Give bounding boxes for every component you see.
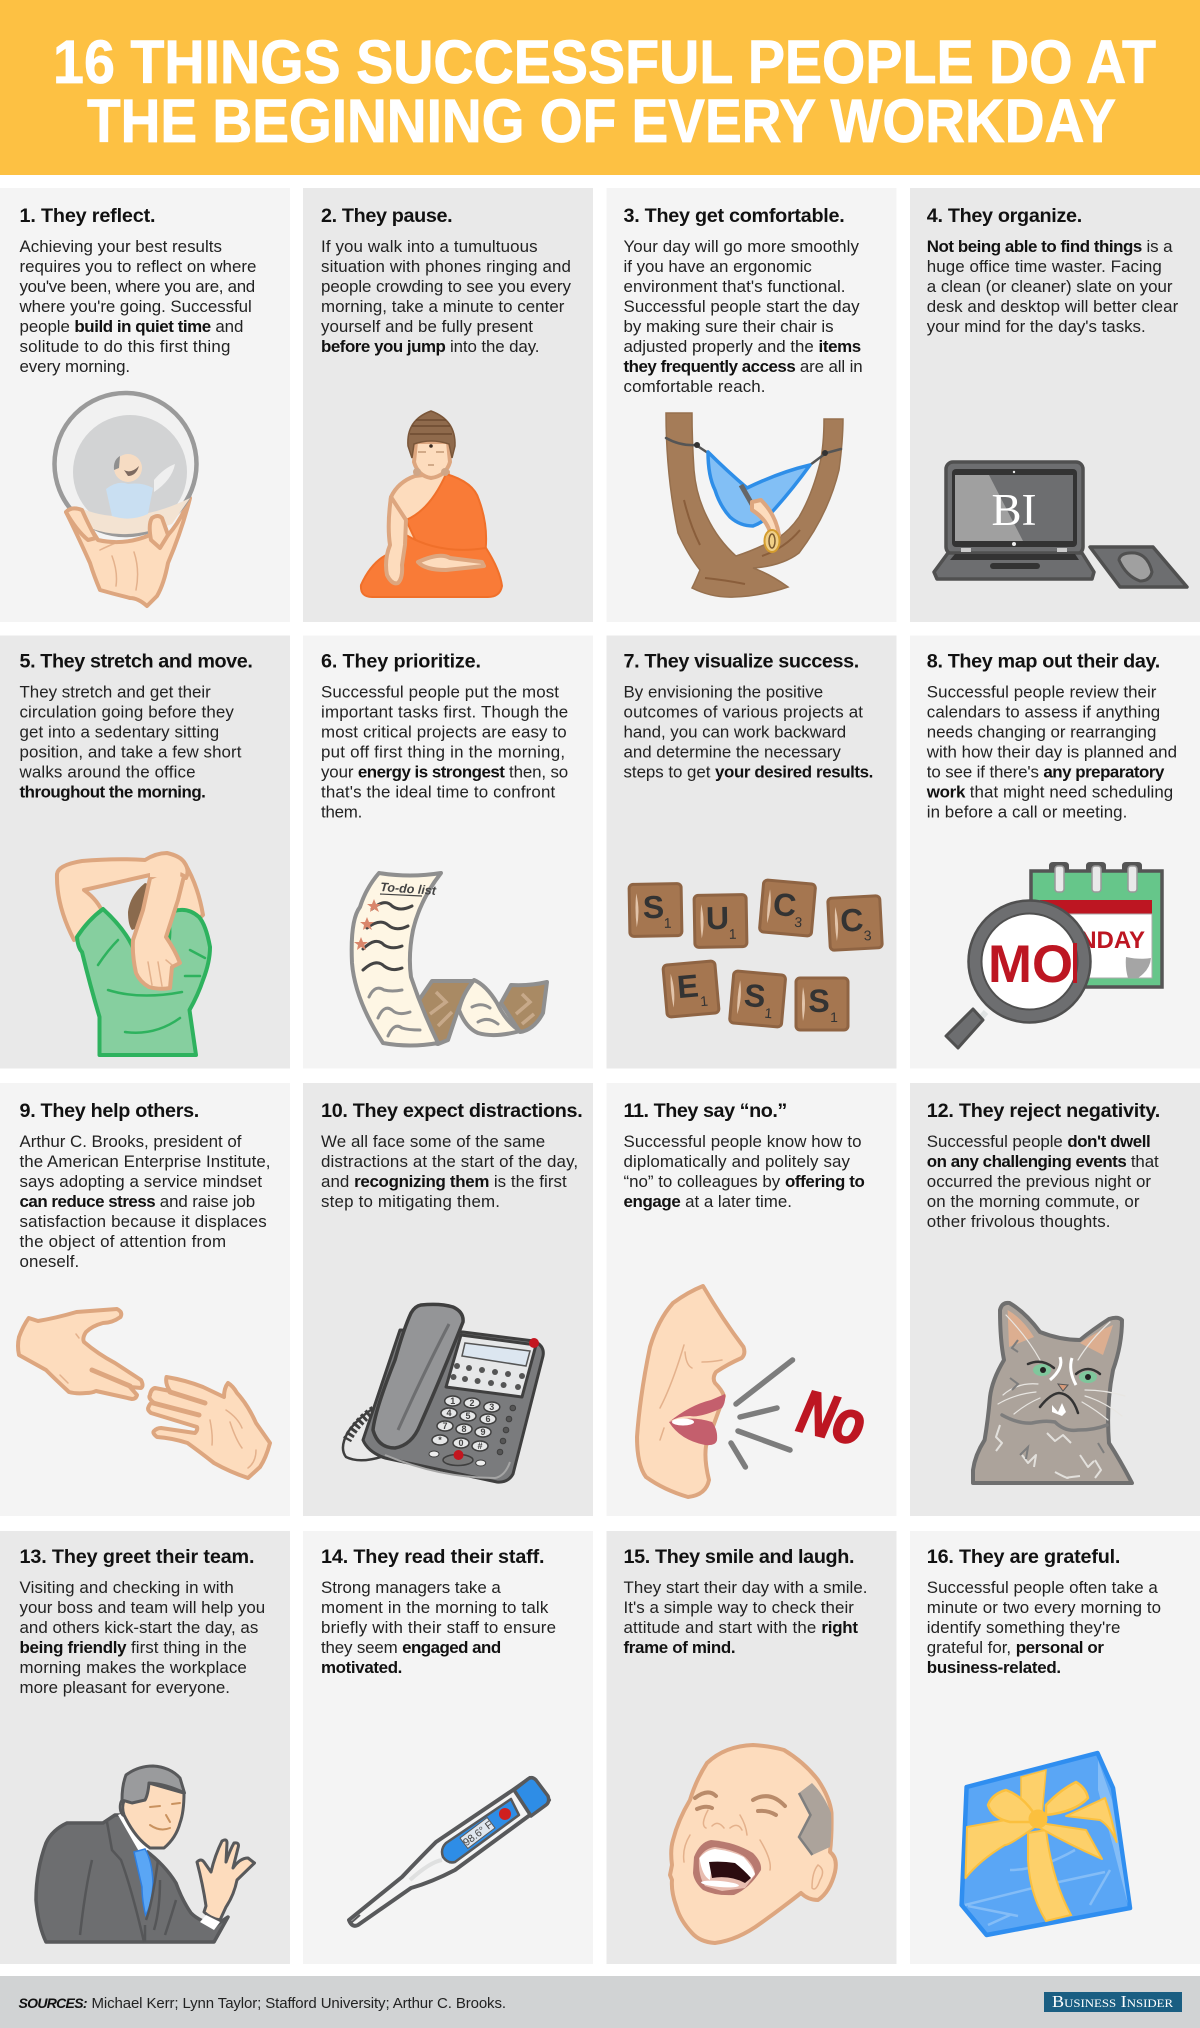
body text 15: They start their day with a smile.: [624, 1578, 868, 1597]
body text 4: desk and desktop will better clear: [927, 297, 1179, 316]
body text 1: Achieving your best results: [20, 237, 222, 256]
body text 3: adjusted properly and the items: [624, 337, 861, 356]
panel 4: They organize: [910, 188, 1200, 622]
body text 9: can reduce stress and raise job: [20, 1192, 255, 1211]
body text 11: Successful people know how to: [624, 1132, 862, 1151]
to-do list label: To-do list: [380, 880, 437, 898]
heading 16: 16. They are grateful.: [927, 1546, 1120, 1568]
icon: left reaching hand: [18, 1309, 142, 1399]
body text 8: work that might need scheduling: [926, 782, 1173, 802]
phone keypad: 9: [480, 1427, 486, 1437]
body text 13: being friendly first thing in the: [20, 1638, 247, 1657]
phone keypad: [429, 1338, 539, 1466]
tile C: C: [772, 886, 798, 924]
body text 2: situation with phones ringing and: [321, 257, 571, 276]
body text 9: the object of attention from: [20, 1232, 226, 1251]
body text 1: you've been, where you are, and: [20, 277, 255, 296]
icon: desk phone: [343, 1304, 543, 1482]
body text 11: diplomatically and politely say: [624, 1152, 851, 1171]
body text 7: hand, you can work backward: [624, 722, 846, 742]
phone keypad: 0: [458, 1438, 464, 1448]
phone keypad: 1: [450, 1396, 455, 1406]
body text 5: walks around the office: [18, 762, 196, 782]
body text 6: most critical projects are easy to: [321, 722, 567, 742]
body text 5: circulation going before they: [20, 702, 234, 722]
tile S: 1: [664, 915, 672, 931]
body text 5: get into a sedentary sitting: [20, 722, 219, 742]
body text 8: to see if there's any preparatory: [927, 762, 1165, 782]
body text 14: moment in the morning to talk: [321, 1598, 549, 1617]
body text 3: Successful people start the day: [624, 297, 860, 316]
thermometer reading: 98.6° F: [461, 1819, 495, 1849]
logo: Business Insider: Business Insider: [1052, 1992, 1173, 2011]
body text 8: Successful people review their: [927, 682, 1157, 702]
body text 8: calendars to assess if anything: [927, 702, 1160, 722]
phone keypad: 6: [485, 1414, 491, 1424]
panel 16: They are grateful: [910, 1531, 1200, 1964]
icon: meditating buddha: [361, 411, 502, 597]
body text 5: They stretch and get their: [20, 682, 211, 702]
tile S: [796, 978, 848, 1030]
body text 6: [321, 682, 568, 822]
body text 12: Successful people don't dwell: [927, 1132, 1150, 1151]
body text 8: [926, 682, 1177, 822]
title: THE BEGINNING OF EVERY WORKDAY: [87, 87, 1116, 155]
body text 7: steps to get your desired results.: [624, 762, 873, 782]
heading 9: 9. They help others.: [20, 1100, 199, 1122]
body text 10: We all face some of the same: [321, 1132, 545, 1151]
body text 4: Not being able to find things is a: [927, 237, 1173, 256]
body text 9: Arthur C. Brooks, president of: [20, 1132, 242, 1151]
panel 15: They smile and laugh: [606, 1531, 896, 1964]
body text 2: morning, take a minute to center: [321, 297, 565, 316]
heading 5: 5. They stretch and move.: [20, 650, 253, 672]
icon: laptop and mouse pad: BI: [992, 485, 1036, 535]
tile U: U: [706, 900, 729, 936]
body text 14: Strong managers take a: [321, 1578, 501, 1597]
magnified text: MO: [988, 935, 1073, 994]
icon: grumpy cat: [973, 1303, 1132, 1483]
tile S: 1: [830, 1009, 838, 1025]
header banner: [0, 0, 1200, 175]
phone keypad: 2: [469, 1398, 475, 1408]
body text 16: Successful people often take a: [927, 1578, 1158, 1597]
icon: right reaching hand: [148, 1377, 270, 1478]
sources line: SOURCES:: [18, 1995, 88, 2011]
body text 3: Your day will go more smoothly: [624, 237, 859, 256]
open mouth: [693, 1840, 761, 1895]
heading 2: 2. They pause.: [321, 205, 453, 227]
body text 1: every morning.: [20, 357, 130, 376]
panel 7: They visualize success: [606, 636, 896, 1068]
panel 6: They prioritize: [303, 636, 593, 1068]
body text 9: [20, 1132, 270, 1271]
tile C: [759, 880, 816, 936]
body text 9: the American Enterprise Institute,: [20, 1152, 270, 1171]
body text 15: [624, 1578, 868, 1657]
body text 3: [624, 237, 863, 396]
icon: laptop and mouse pad: [934, 462, 1187, 587]
body text 3: comfortable reach.: [624, 377, 766, 396]
icon: person stretching arm behind head: [57, 853, 210, 1055]
icon: calendar with magnifying glass: [946, 862, 1162, 1048]
panel 12: They reject negativity: [910, 1083, 1200, 1516]
tile S: S: [808, 983, 830, 1019]
body text 9: oneself.: [20, 1252, 79, 1271]
body text 14: they seem engaged and: [321, 1638, 501, 1657]
body text 15: attitude and start with the right: [624, 1618, 858, 1637]
icon: digital thermometer: [349, 1778, 549, 1926]
body text 2: people crowding to see you every: [321, 277, 571, 296]
panel 5: They stretch and move: [0, 636, 290, 1068]
body text 11: [624, 1132, 865, 1211]
phone keypad: #: [477, 1441, 483, 1451]
no text: No: [792, 1377, 872, 1459]
body text 12: on any challenging events that: [927, 1152, 1159, 1171]
footer bar: [0, 1976, 1200, 2028]
tile U: [694, 895, 747, 947]
body text 1: solitude to do this first thing: [20, 337, 230, 356]
body text 8: with how their day is planned and: [926, 742, 1177, 762]
icon: to-do list scroll: [352, 873, 547, 1046]
heading 10: 10. They expect distractions.: [321, 1100, 583, 1122]
phone keypad: 5: [465, 1411, 471, 1421]
body text 2: If you walk into a tumultuous: [321, 237, 538, 256]
heading 7: 7. They visualize success.: [624, 650, 859, 672]
body text 10: and recognizing them is the first: [321, 1172, 567, 1191]
panel 14: They read their staff: [303, 1531, 593, 1964]
tile U: 1: [729, 926, 737, 942]
icon: face saying no: [637, 1286, 872, 1497]
sources line: Michael Kerr; Lynn Taylor; Stafford University; Arthur C. Brooks.: [92, 1995, 506, 2012]
panel 13: They greet their team: [0, 1531, 290, 1964]
icon: hammock between forked tree: [666, 413, 843, 597]
panel 10: They expect distractions: [303, 1083, 593, 1516]
body text 3: they frequently access are all in: [624, 357, 863, 376]
tile E: [663, 961, 719, 1017]
tile S: S: [642, 889, 664, 925]
calendar day text: NDAY: [1079, 927, 1145, 954]
body text 2: yourself and be fully present: [321, 317, 533, 336]
heading 15: 15. They smile and laugh.: [624, 1546, 854, 1568]
body text 6: put off first thing in the morning,: [321, 742, 565, 762]
body text 2: [321, 237, 571, 356]
body text 12: on the morning commute, or: [927, 1192, 1140, 1211]
body text 14: [321, 1578, 556, 1677]
heading 11: 11. They say “no.”: [624, 1100, 787, 1122]
body text 3: environment that's functional.: [624, 277, 846, 296]
body text 7: outcomes of various projects at: [624, 702, 863, 722]
body text 4: your mind for the day's tasks.: [927, 317, 1146, 336]
body text 7: and determine the necessary: [624, 742, 841, 762]
body text 9: says adopting a service mindset: [20, 1172, 262, 1191]
tile S: 1: [764, 1005, 773, 1021]
body text 14: briefly with their staff to ensure: [321, 1618, 556, 1637]
body text 1: where you're going. Successful: [18, 297, 252, 316]
tile C: [828, 896, 882, 950]
body text 7: [624, 682, 873, 782]
body text 8: needs changing or rearranging: [927, 722, 1156, 742]
phone keypad: 3: [489, 1402, 494, 1412]
body text 10: step to mitigating them.: [321, 1192, 500, 1211]
tile S: [729, 971, 786, 1027]
fingers gripping the ball: [66, 508, 168, 548]
tile E: 1: [700, 993, 709, 1009]
tile C: 3: [863, 927, 872, 944]
tile C: 3: [794, 914, 803, 930]
body text 12: other frivolous thoughts.: [927, 1212, 1110, 1231]
heading 1: 1. They reflect.: [20, 205, 156, 227]
panel 9: They help others: [0, 1083, 290, 1516]
icon: crystal ball held in a hand: [54, 393, 196, 606]
body text 4: a clean (or cleaner) slate on your: [927, 277, 1173, 296]
body text 1: people build in quiet time and: [20, 317, 243, 336]
phone keypad: *: [438, 1435, 442, 1445]
body text 13: Visiting and checking in with: [20, 1578, 234, 1597]
body text 6: that's the ideal time to confront: [321, 782, 555, 802]
icon: gift box with ribbon: [962, 1753, 1130, 1935]
body text 16: business-related.: [927, 1658, 1061, 1677]
body text 6: your energy is strongest then, so: [321, 762, 568, 782]
body text 16: minute or two every morning to: [927, 1598, 1161, 1617]
panel 2: They pause: [303, 188, 593, 622]
icon: laughing man's face: [670, 1745, 836, 1943]
body text 6: them.: [321, 802, 362, 822]
body text 8: in before a call or meeting.: [927, 802, 1127, 822]
body text 5: position, and take a few short: [20, 742, 242, 762]
body text 5: [18, 682, 242, 802]
heading 14: 14. They read their staff.: [321, 1546, 544, 1568]
tile C: C: [839, 902, 864, 939]
body text 9: satisfaction because it displaces: [20, 1212, 267, 1231]
phone keypad: 8: [461, 1424, 467, 1434]
body text 11: engage at a later time.: [624, 1192, 792, 1211]
body text 15: frame of mind.: [624, 1638, 735, 1657]
body text 13: more pleasant for everyone.: [20, 1678, 230, 1697]
tile S: S: [743, 977, 767, 1015]
tile E: E: [676, 967, 700, 1005]
heading 6: 6. They prioritize.: [321, 650, 481, 672]
body text 6: Successful people put the most: [321, 682, 559, 702]
body text 4: [927, 237, 1179, 336]
body text 1: [18, 237, 256, 376]
body text 10: [321, 1132, 578, 1211]
icon: scrabble tiles spelling success: [629, 880, 882, 1030]
panel 8: They map out their day: [910, 636, 1200, 1068]
body text 16: identify something they're: [927, 1618, 1120, 1637]
body text 16: [927, 1578, 1161, 1677]
body text 11: “no” to colleagues by offering to: [624, 1172, 865, 1191]
body text 10: distractions at the start of the day,: [321, 1152, 578, 1171]
heading 3: 3. They get comfortable.: [624, 205, 845, 227]
body text 14: motivated.: [321, 1658, 402, 1677]
body text 12: [927, 1132, 1159, 1231]
arm resting on knee: [386, 497, 406, 583]
heading 8: 8. They map out their day.: [927, 650, 1160, 672]
body text 13: [20, 1578, 265, 1697]
panel 11: They say no: [606, 1083, 896, 1516]
heading 12: 12. They reject negativity.: [927, 1100, 1160, 1122]
tile S: [629, 884, 682, 936]
icon: waving businessman: [36, 1766, 254, 1942]
panel 3: They get comfortable: [606, 188, 896, 622]
body text 4: huge office time waster. Facing: [927, 257, 1162, 276]
body text 13: your boss and team will help you: [20, 1598, 265, 1617]
phone keypad: 7: [442, 1421, 448, 1431]
body text 13: morning makes the workplace: [20, 1658, 247, 1677]
body text 2: before you jump into the day.: [321, 337, 540, 356]
body text 16: grateful for, personal or: [927, 1638, 1104, 1657]
body text 3: if you have an ergonomic: [624, 257, 812, 276]
panel 1: They reflect: [0, 188, 290, 622]
body text 15: It's a simple way to check their: [624, 1598, 854, 1617]
body text 12: occurred the previous night or: [927, 1172, 1151, 1191]
heading 4: 4. They organize.: [927, 205, 1082, 227]
body text 6: important tasks first. Though the: [321, 702, 568, 722]
body text 13: and others kick-start the day, as: [20, 1618, 258, 1637]
phone keypad: 4: [446, 1408, 452, 1418]
body text 3: by making sure their chair is: [624, 317, 834, 336]
body text 7: By envisioning the positive: [624, 682, 823, 702]
body text 1: requires you to reflect on where: [20, 257, 256, 276]
heading 13: 13. They greet their team.: [20, 1546, 254, 1568]
body text 5: throughout the morning.: [20, 782, 206, 802]
